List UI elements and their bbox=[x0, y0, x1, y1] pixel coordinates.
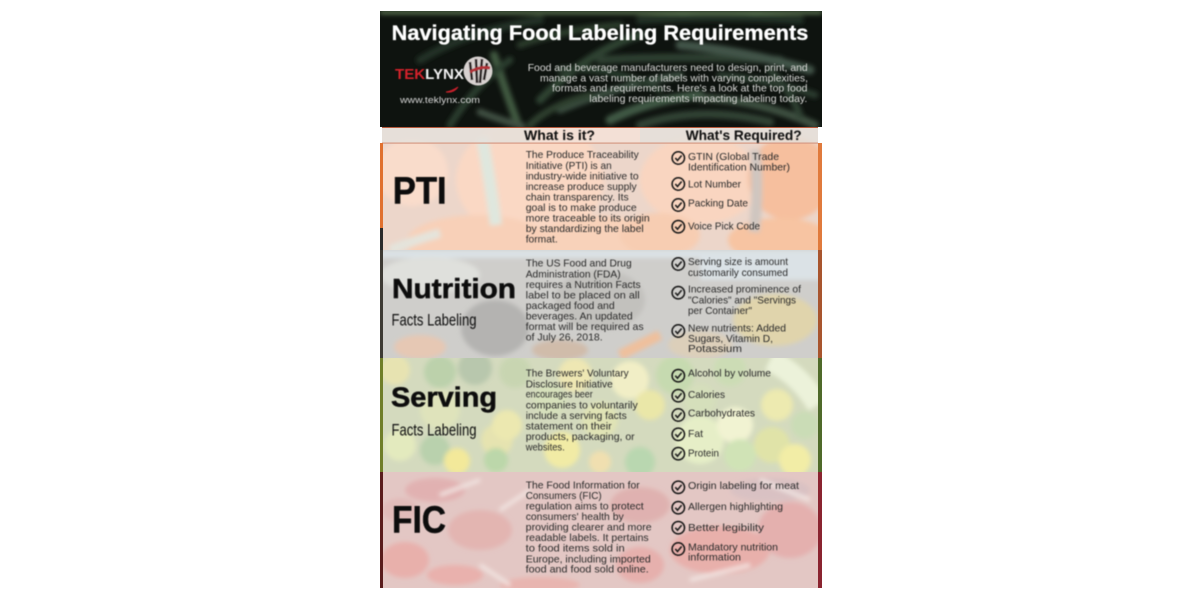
item: GTIN bbox=[688, 151, 790, 174]
item: lot number: Lot Number bbox=[688, 178, 741, 190]
label: Serving Facts Labeling: Facts Labeling bbox=[392, 420, 476, 440]
heading: What is it?: What is it? bbox=[524, 127, 595, 143]
icon: check new nutrients bbox=[672, 325, 684, 337]
panel: Nutrition row with vegetable photo bbox=[380, 250, 822, 360]
text: FIC description: providing clearer and more bbox=[526, 522, 652, 534]
text: Serving description: companies to voluntarily bbox=[526, 399, 638, 411]
item: new nutrients bbox=[688, 323, 786, 355]
text: Serving description: include a serving facts bbox=[526, 410, 627, 422]
text: Serving description: statement on their bbox=[526, 420, 612, 432]
icon: check mandatory bbox=[672, 543, 684, 555]
text: PTI description: chain transparency. Its bbox=[526, 192, 629, 204]
logo: TEKLYNX: TEKLYNX bbox=[395, 66, 464, 83]
text: Nutrition description bbox=[526, 258, 644, 343]
icon: check packing date bbox=[672, 199, 684, 211]
text: Serving description: products, packaging, or bbox=[526, 431, 635, 443]
item: serving size: Serving size is amount bbox=[688, 256, 788, 268]
intro text: formats and requirements. Here's a look at the top food bbox=[552, 83, 808, 95]
text: FIC description: readable labels. It pertains bbox=[526, 532, 649, 544]
text: PTI description: Initiative (PTI) is an bbox=[526, 160, 612, 172]
checklist: Nutrition requirements bbox=[672, 256, 801, 355]
label: Serving Facts Labeling: Serving bbox=[391, 382, 497, 413]
text: FIC description: regulation aims to protect bbox=[526, 500, 644, 512]
text: Serving description: The Brewers' Voluntary bbox=[526, 368, 629, 380]
panel: PTI row with pumpkin photo bbox=[382, 128, 818, 250]
logo url: www.teklynx.com bbox=[399, 95, 480, 106]
icon: check carbohydrates bbox=[672, 409, 684, 421]
icon: check GTIN bbox=[672, 152, 684, 164]
text: PTI description: goal is to make produce bbox=[526, 202, 637, 214]
label: FIC: FIC bbox=[392, 499, 446, 541]
text: Serving description: Disclosure Initiative bbox=[526, 378, 613, 390]
text: FIC description: to food items sold in bbox=[526, 543, 625, 555]
item: protein: Protein bbox=[688, 447, 719, 459]
icon: check origin bbox=[672, 481, 684, 493]
panel: header with green bean photo bbox=[380, 11, 822, 127]
item: prominence: Increased prominence of bbox=[688, 284, 801, 296]
text: PTI description: format. bbox=[526, 234, 558, 246]
text: Nutrition description: of July 26, 2018. bbox=[526, 331, 603, 343]
text: PTI description bbox=[526, 149, 650, 246]
label: Nutrition Facts Labeling: Facts Labeling bbox=[392, 310, 476, 330]
intro text: Food and beverage manufacturers need to design, print, and bbox=[528, 62, 808, 74]
item: legibility: Better legibility bbox=[688, 522, 765, 534]
text: FIC description: The Food Information for bbox=[526, 479, 640, 491]
text: PTI description: industry-wide initiative to bbox=[526, 170, 639, 182]
text: Nutrition description: label to be placed on all bbox=[526, 289, 640, 301]
item: alcohol: Alcohol by volume bbox=[688, 368, 771, 380]
icon: check lot number bbox=[672, 178, 684, 190]
icon: check prominence bbox=[672, 286, 684, 299]
item: new nutrients: Potassium bbox=[688, 343, 742, 355]
icon: check serving size bbox=[672, 258, 684, 270]
item: GTIN: Identification Number) bbox=[688, 162, 790, 174]
text: PTI description: by standardizing the label bbox=[526, 223, 644, 235]
icon: check calories bbox=[672, 390, 684, 402]
checklist: Serving requirements bbox=[672, 368, 771, 460]
icon: check protein bbox=[672, 448, 684, 460]
title: Navigating Food Labeling Requirements bbox=[392, 22, 808, 45]
item: calories: Calories bbox=[688, 389, 725, 401]
text: FIC description: consumers' health by bbox=[526, 511, 624, 523]
text: Nutrition description: beverages. An updated bbox=[526, 310, 633, 322]
item: mandatory: information bbox=[688, 551, 741, 563]
text: Nutrition description: packaged food and bbox=[526, 300, 615, 312]
text: PTI description: more traceable to its origin bbox=[526, 213, 650, 225]
panel: FIC row with red pepper photo bbox=[380, 472, 822, 593]
panel: column heading band bbox=[382, 127, 818, 144]
icon: check fat bbox=[672, 428, 684, 440]
text: PTI description: The Produce Traceability bbox=[526, 149, 639, 161]
item: voice pick code: Voice Pick Code bbox=[688, 220, 760, 232]
text: FIC description: Europe, including imported bbox=[526, 553, 651, 565]
label: Nutrition Facts Labeling: Nutrition bbox=[392, 273, 516, 304]
item: allergen: Allergen highlighting bbox=[688, 501, 783, 513]
intro text: manage a vast number of labels with varying complexities, bbox=[540, 73, 808, 85]
label: PTI: PTI bbox=[393, 170, 447, 212]
label: Nutrition Facts Labeling bbox=[392, 273, 516, 330]
icon: check alcohol bbox=[672, 370, 684, 382]
item: new nutrients: Sugars, Vitamin D, bbox=[688, 333, 773, 345]
text: Serving description bbox=[525, 368, 638, 453]
item: GTIN: GTIN (Global Trade bbox=[688, 151, 779, 163]
item: serving size: customarily consumed bbox=[688, 267, 788, 279]
intro text bbox=[528, 62, 808, 105]
item: prominence bbox=[688, 284, 801, 317]
icon: check voice pick code bbox=[672, 220, 684, 233]
checklist: FIC requirements bbox=[672, 480, 799, 563]
item: mandatory: Mandatory nutrition bbox=[688, 541, 778, 553]
text: Nutrition description: Administration (FDA) bbox=[526, 268, 621, 280]
text: Nutrition description: The US Food and Drug bbox=[526, 258, 632, 270]
item: carbohydrates: Carbohydrates bbox=[688, 408, 755, 420]
icon: check legibility bbox=[672, 522, 684, 534]
panel: photo edge strips bbox=[380, 143, 822, 588]
text: PTI description: increase produce supply bbox=[526, 181, 637, 193]
item: packing date: Packing Date bbox=[688, 198, 748, 210]
item: prominence: "Calories" and "Servings bbox=[688, 294, 796, 306]
text: Nutrition description: requires a Nutrition Facts bbox=[526, 279, 641, 291]
item: new nutrients: New nutrients: Added bbox=[688, 323, 786, 335]
icon: check allergen bbox=[672, 502, 684, 514]
text: Serving description: websites. bbox=[525, 441, 565, 453]
item: prominence: per Container" bbox=[688, 305, 752, 317]
item: origin: Origin labeling for meat bbox=[688, 480, 799, 492]
text: FIC description bbox=[526, 479, 652, 576]
text: FIC description: food and food sold online. bbox=[526, 564, 649, 576]
logo: TEKLYNX bbox=[395, 56, 492, 92]
label: Serving Facts Labeling bbox=[391, 382, 497, 440]
item: mandatory bbox=[688, 541, 778, 563]
item: serving size bbox=[688, 256, 788, 279]
checklist: PTI requirements bbox=[672, 151, 790, 233]
text: FIC description: Consumers (FIC) bbox=[526, 490, 602, 502]
heading: What's Required?: What's Required? bbox=[686, 127, 802, 143]
text: Serving description: encourages beer bbox=[526, 389, 593, 401]
text: Nutrition description: format will be required as bbox=[526, 321, 644, 333]
item: fat: Fat bbox=[688, 428, 703, 440]
panel: Serving row with citrus photo bbox=[383, 358, 818, 472]
intro text: labeling requirements impacting labeling today. bbox=[589, 93, 807, 105]
